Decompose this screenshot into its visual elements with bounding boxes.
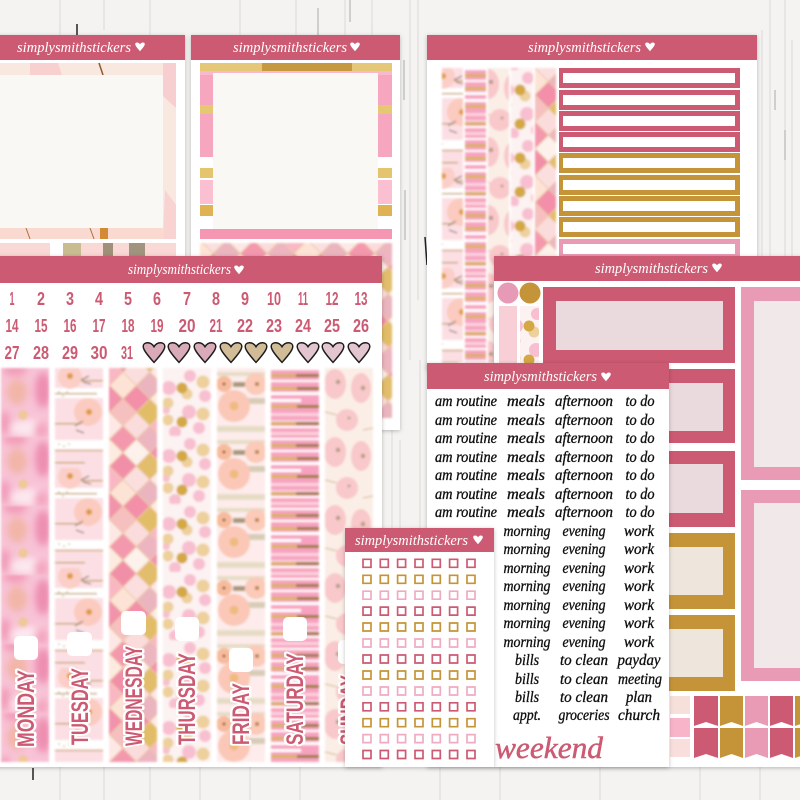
word rows: routines, meals, afternoon, to do: am routine bbox=[435, 486, 497, 503]
pink and gold frame bbox=[200, 63, 392, 239]
sheet: top left journal box bbox=[0, 35, 185, 275]
header: top left sheet: simplysmithstickers bbox=[17, 40, 131, 56]
date numbers: 29 bbox=[62, 343, 78, 363]
header: calendar sheet bbox=[0, 256, 382, 283]
date numbers: 9 bbox=[241, 289, 249, 309]
word rows: routines, meals, afternoon, to do: afternoon bbox=[555, 486, 613, 503]
word rows: routines, meals, afternoon, to do: to do bbox=[626, 504, 655, 521]
header: script word sheet: simplysmithstickers bbox=[484, 369, 597, 385]
date numbers: 18 bbox=[122, 316, 134, 336]
date numbers: 22 bbox=[237, 316, 253, 336]
sheet: top middle journal box bbox=[191, 35, 400, 430]
word rows: routines, meals, afternoon, to do: to do bbox=[626, 393, 655, 410]
word rows: morning, evening, work: morning bbox=[504, 541, 551, 558]
date numbers: 27 bbox=[4, 343, 20, 363]
weekday labels: SUNDAY bbox=[336, 675, 363, 745]
date numbers: 31 bbox=[121, 343, 133, 363]
word rows: routines, meals, afternoon, to do: meals bbox=[507, 504, 545, 521]
word rows: morning, evening, work: work bbox=[624, 615, 655, 632]
word rows: routines, meals, afternoon, to do: to do bbox=[626, 467, 655, 484]
word rows: routines, meals, afternoon, to do: to do bbox=[626, 486, 655, 503]
date numbers: 13 bbox=[354, 289, 368, 309]
circles and small strips bbox=[498, 282, 540, 366]
header: checkbox sheet bbox=[345, 528, 494, 552]
word rows: morning, evening, work bbox=[504, 523, 655, 651]
word rows: routines, meals, afternoon, to do: to do bbox=[626, 412, 655, 429]
word rows: routines, meals, afternoon, to do: meals bbox=[507, 467, 545, 484]
word rows: morning, evening, work: evening bbox=[562, 615, 606, 632]
word rows: routines, meals, afternoon, to do: meals bbox=[507, 449, 545, 466]
word rows: morning, evening, work: work bbox=[624, 578, 655, 595]
lower washi strip: top left sheet bbox=[0, 243, 176, 256]
word rows: routines, meals, afternoon, to do: afternoon bbox=[555, 449, 613, 466]
word rows: morning, evening, work: morning bbox=[504, 578, 551, 595]
word rows: morning, evening, work: morning bbox=[504, 560, 551, 577]
header: framed boxes sheet: simplysmithstickers bbox=[595, 261, 708, 277]
date numbers: 2 bbox=[37, 289, 45, 309]
word rows: routines, meals, afternoon, to do: to do bbox=[626, 430, 655, 447]
word rows: bills, to clean, appointments: church bbox=[618, 707, 660, 724]
word rows: morning, evening, work: work bbox=[624, 597, 655, 614]
header: top middle sheet bbox=[191, 35, 400, 60]
word rows: routines, meals, afternoon, to do: afternoon bbox=[555, 412, 613, 429]
header: calendar sheet: simplysmithstickers bbox=[128, 262, 231, 278]
word rows: routines, meals, afternoon, to do bbox=[435, 393, 655, 521]
date numbers: 6 bbox=[153, 289, 161, 309]
rose label boxes bbox=[559, 68, 740, 152]
lower washi strip: top middle sheet bbox=[200, 243, 392, 418]
word rows: routines, meals, afternoon, to do: am routine bbox=[435, 449, 497, 466]
header: framed boxes sheet bbox=[494, 256, 800, 281]
word rows: routines, meals, afternoon, to do: am routine bbox=[435, 504, 497, 521]
date numbers: 3 bbox=[66, 289, 74, 309]
word rows: morning, evening, work: work bbox=[624, 634, 655, 651]
date numbers: 5 bbox=[124, 289, 132, 309]
word rows: routines, meals, afternoon, to do: meals bbox=[507, 393, 545, 410]
weekday labels: MONDAY bbox=[13, 670, 40, 747]
white date squares bbox=[14, 611, 362, 672]
checkbox rows bbox=[363, 559, 475, 758]
date numbers: 11 bbox=[298, 289, 308, 309]
date numbers: 4 bbox=[95, 289, 103, 309]
word rows: bills, to clean, appointments: payday bbox=[617, 652, 661, 669]
weekday labels: FRIDAY bbox=[228, 683, 255, 745]
word rows: routines, meals, afternoon, to do: afternoon bbox=[555, 393, 613, 410]
word rows: bills, to clean, appointments: bills bbox=[515, 689, 539, 706]
word rows: bills, to clean, appointments: appt. bbox=[513, 707, 541, 724]
word rows: morning, evening, work: morning bbox=[504, 634, 551, 651]
word rows: routines, meals, afternoon, to do: afternoon bbox=[555, 467, 613, 484]
date numbers: 12 bbox=[326, 289, 338, 309]
sheet: washi strips and label boxes bbox=[427, 35, 757, 370]
word rows: morning, evening, work: evening bbox=[562, 523, 606, 540]
label box interiors bbox=[563, 73, 735, 254]
date numbers: 23 bbox=[266, 316, 282, 336]
date numbers: 24 bbox=[295, 316, 311, 336]
header: script word sheet bbox=[427, 363, 669, 389]
date numbers: 21 bbox=[210, 316, 222, 336]
word rows: morning, evening, work: morning bbox=[504, 597, 551, 614]
word rows: routines, meals, afternoon, to do: am routine bbox=[435, 430, 497, 447]
date numbers: 14 bbox=[6, 316, 18, 336]
word rows: routines, meals, afternoon, to do: afternoon bbox=[555, 504, 613, 521]
date numbers: 19 bbox=[150, 316, 164, 336]
weekday labels: SATURDAY bbox=[282, 653, 309, 745]
word rows: morning, evening, work: evening bbox=[562, 560, 606, 577]
word rows: bills, to clean, appointments: meeting bbox=[618, 671, 662, 688]
date numbers: 26 bbox=[353, 316, 369, 336]
word rows: morning, evening, work: evening bbox=[562, 634, 606, 651]
date numbers: 17 bbox=[92, 316, 106, 336]
date numbers: 8 bbox=[212, 289, 220, 309]
rose framed boxes bbox=[543, 287, 735, 527]
header: top left sheet bbox=[0, 35, 185, 60]
word rows: bills, to clean, appointments: bills bbox=[515, 652, 539, 669]
sheet: framed boxes bbox=[494, 256, 800, 767]
vertical washi strips bbox=[442, 68, 556, 363]
weekday labels bbox=[13, 646, 363, 747]
date numbers: 16 bbox=[64, 316, 76, 336]
word rows: routines, meals, afternoon, to do: afternoon bbox=[555, 430, 613, 447]
word rows: bills, to clean, appointments: bills bbox=[515, 671, 539, 688]
date numbers: 30 bbox=[90, 343, 108, 363]
date numbers: 1 bbox=[10, 289, 14, 309]
date numbers: 28 bbox=[33, 343, 49, 363]
word rows: morning, evening, work: work bbox=[624, 541, 655, 558]
date numbers: 20 bbox=[178, 316, 196, 336]
header: checkbox sheet: simplysmithstickers bbox=[355, 533, 468, 549]
flag stickers bbox=[694, 696, 800, 758]
word rows: bills, to clean, appointments: to clean bbox=[560, 671, 608, 688]
date numbers: 15 bbox=[34, 316, 48, 336]
word rows: routines, meals, afternoon, to do: am routine bbox=[435, 412, 497, 429]
date numbers bbox=[4, 289, 369, 363]
word rows: routines, meals, afternoon, to do: meals bbox=[507, 430, 545, 447]
weekday labels: TUESDAY bbox=[67, 668, 94, 745]
word rows: routines, meals, afternoon, to do: meals bbox=[507, 486, 545, 503]
word rows: morning, evening, work: evening bbox=[562, 597, 606, 614]
word rows: morning, evening, work: work bbox=[624, 560, 655, 577]
word rows: routines, meals, afternoon, to do: to do bbox=[626, 449, 655, 466]
date numbers: 10 bbox=[267, 289, 281, 309]
word rows: routines, meals, afternoon, to do: am routine bbox=[435, 393, 497, 410]
weekday washi strips bbox=[1, 368, 373, 762]
word rows: morning, evening, work: evening bbox=[562, 541, 606, 558]
sheet: script word stickers bbox=[427, 363, 669, 767]
heart stickers bbox=[143, 343, 370, 362]
word rows: morning, evening, work: work bbox=[624, 523, 655, 540]
word rows: bills, to clean, appointments: plan bbox=[625, 689, 652, 706]
word rows: bills, to clean, appointments bbox=[513, 652, 662, 724]
gold label boxes bbox=[559, 153, 740, 237]
word rows: bills, to clean, appointments: to clean bbox=[560, 652, 608, 669]
word rows: bills, to clean, appointments: to clean bbox=[560, 689, 608, 706]
pink label box bbox=[559, 239, 740, 259]
tall pink framed boxes bbox=[741, 287, 800, 681]
gold framed boxes bbox=[543, 533, 735, 691]
header: washi sheet: simplysmithstickers bbox=[528, 40, 641, 56]
date numbers: 25 bbox=[324, 316, 340, 336]
word rows: routines, meals, afternoon, to do: meals bbox=[507, 412, 545, 429]
word rows: morning, evening, work: evening bbox=[562, 578, 606, 595]
small strip pieces bbox=[670, 696, 690, 757]
word rows: morning, evening, work: morning bbox=[504, 615, 551, 632]
sheet: calendar dates and weekday strips bbox=[0, 256, 382, 767]
weekend script word: weekend bbox=[495, 730, 604, 765]
date numbers: 7 bbox=[183, 289, 191, 309]
header: washi sheet bbox=[427, 35, 757, 60]
word rows: routines, meals, afternoon, to do: am routine bbox=[435, 467, 497, 484]
word rows: morning, evening, work: morning bbox=[504, 523, 551, 540]
peach floral frame bbox=[0, 63, 176, 239]
weekday labels: THURSDAY bbox=[174, 653, 201, 745]
header: top middle sheet: simplysmithstickers bbox=[233, 40, 347, 56]
word rows: bills, to clean, appointments: groceries bbox=[558, 707, 610, 724]
weekday labels: WEDNESDAY bbox=[121, 646, 148, 746]
sheet: checkbox stickers bbox=[345, 528, 494, 767]
